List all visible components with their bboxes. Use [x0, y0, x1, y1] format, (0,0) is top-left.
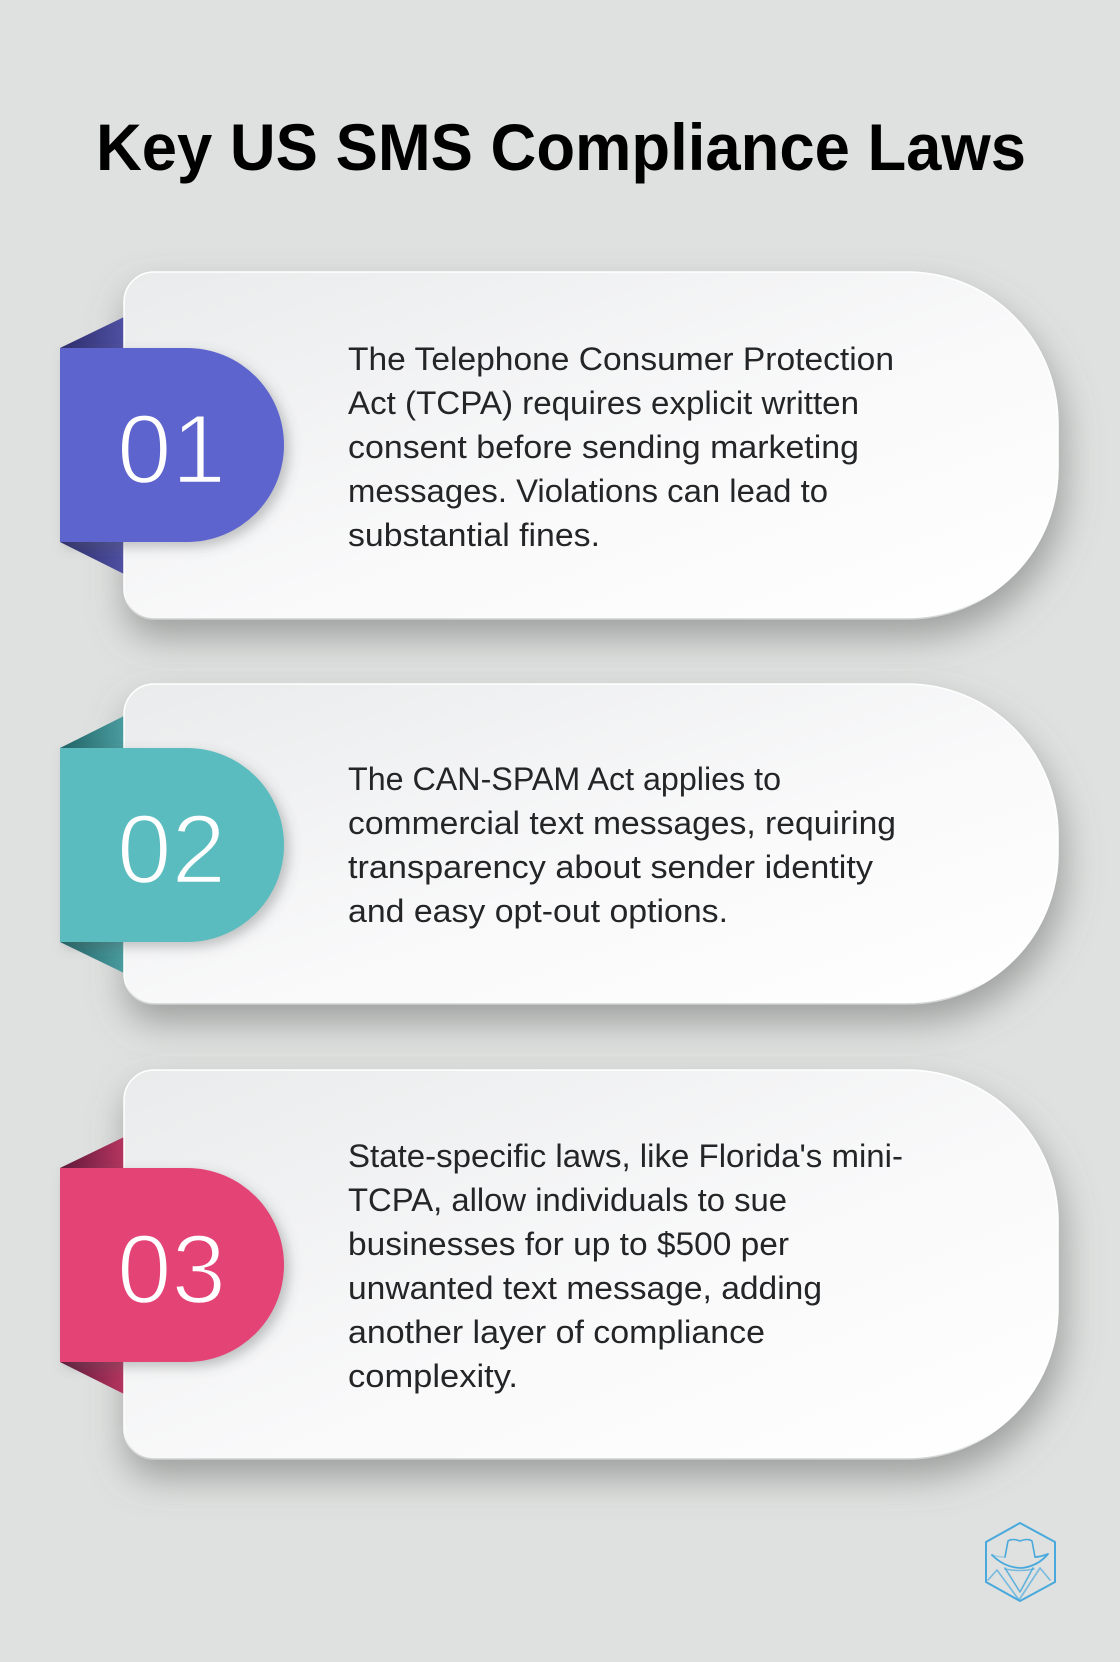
ribbon fold: card 3 bottom	[60, 1362, 124, 1394]
card 1 surface	[124, 272, 1058, 619]
badge 02: 02	[117, 794, 226, 904]
badge 03	[60, 1168, 284, 1362]
body text 2: and easy opt-out options.	[348, 893, 728, 929]
body text 3: TCPA, allow individuals to sue	[348, 1182, 787, 1218]
body text 2	[348, 761, 896, 929]
badge shadow 2	[65, 753, 289, 947]
badge 02	[60, 748, 284, 942]
body text 1	[348, 341, 894, 553]
body text 3: businesses for up to $500 per	[348, 1226, 789, 1262]
ribbon fold: card 2 top	[60, 716, 124, 748]
badge 01: 01	[117, 394, 226, 504]
badge 03: 03	[117, 1214, 226, 1324]
ribbon fold: card 1 top	[60, 317, 124, 348]
ribbon fold: card 2 bottom	[60, 942, 124, 973]
body text 2: commercial text messages, requiring	[348, 805, 896, 841]
icon: hexagon spy logo	[986, 1523, 1055, 1601]
body text 3: another layer of compliance	[348, 1314, 765, 1350]
panel: card 3 State laws	[60, 1070, 1064, 1477]
body text 3: complexity.	[348, 1358, 518, 1394]
body text 2: transparency about sender identity	[348, 849, 873, 885]
card 3 surface	[124, 1070, 1058, 1459]
badge 01	[60, 348, 284, 542]
body text 1: The Telephone Consumer Protection	[348, 341, 894, 377]
body text 2: The CAN-SPAM Act applies to	[348, 761, 781, 797]
body text 1: Act (TCPA) requires explicit written	[348, 385, 859, 421]
body text 3: unwanted text message, adding	[348, 1270, 822, 1306]
body text 1: messages. Violations can lead to	[348, 473, 828, 509]
body text 1: consent before sending marketing	[348, 429, 859, 465]
ribbon fold: card 1 bottom	[60, 542, 124, 574]
body text 3: State-specific laws, like Florida's mini-	[348, 1138, 903, 1174]
title: Key US SMS Compliance Laws	[96, 110, 1026, 184]
body text 3	[348, 1138, 903, 1394]
ribbon fold: card 3 top	[60, 1137, 124, 1168]
body text 1: substantial fines.	[348, 517, 600, 553]
panel: card 2 CAN-SPAM	[60, 684, 1064, 1022]
badge shadow 1	[65, 353, 289, 547]
badge shadow 3	[65, 1173, 289, 1367]
card 2 surface	[124, 684, 1058, 1004]
panel: card 1 TCPA	[60, 272, 1064, 637]
